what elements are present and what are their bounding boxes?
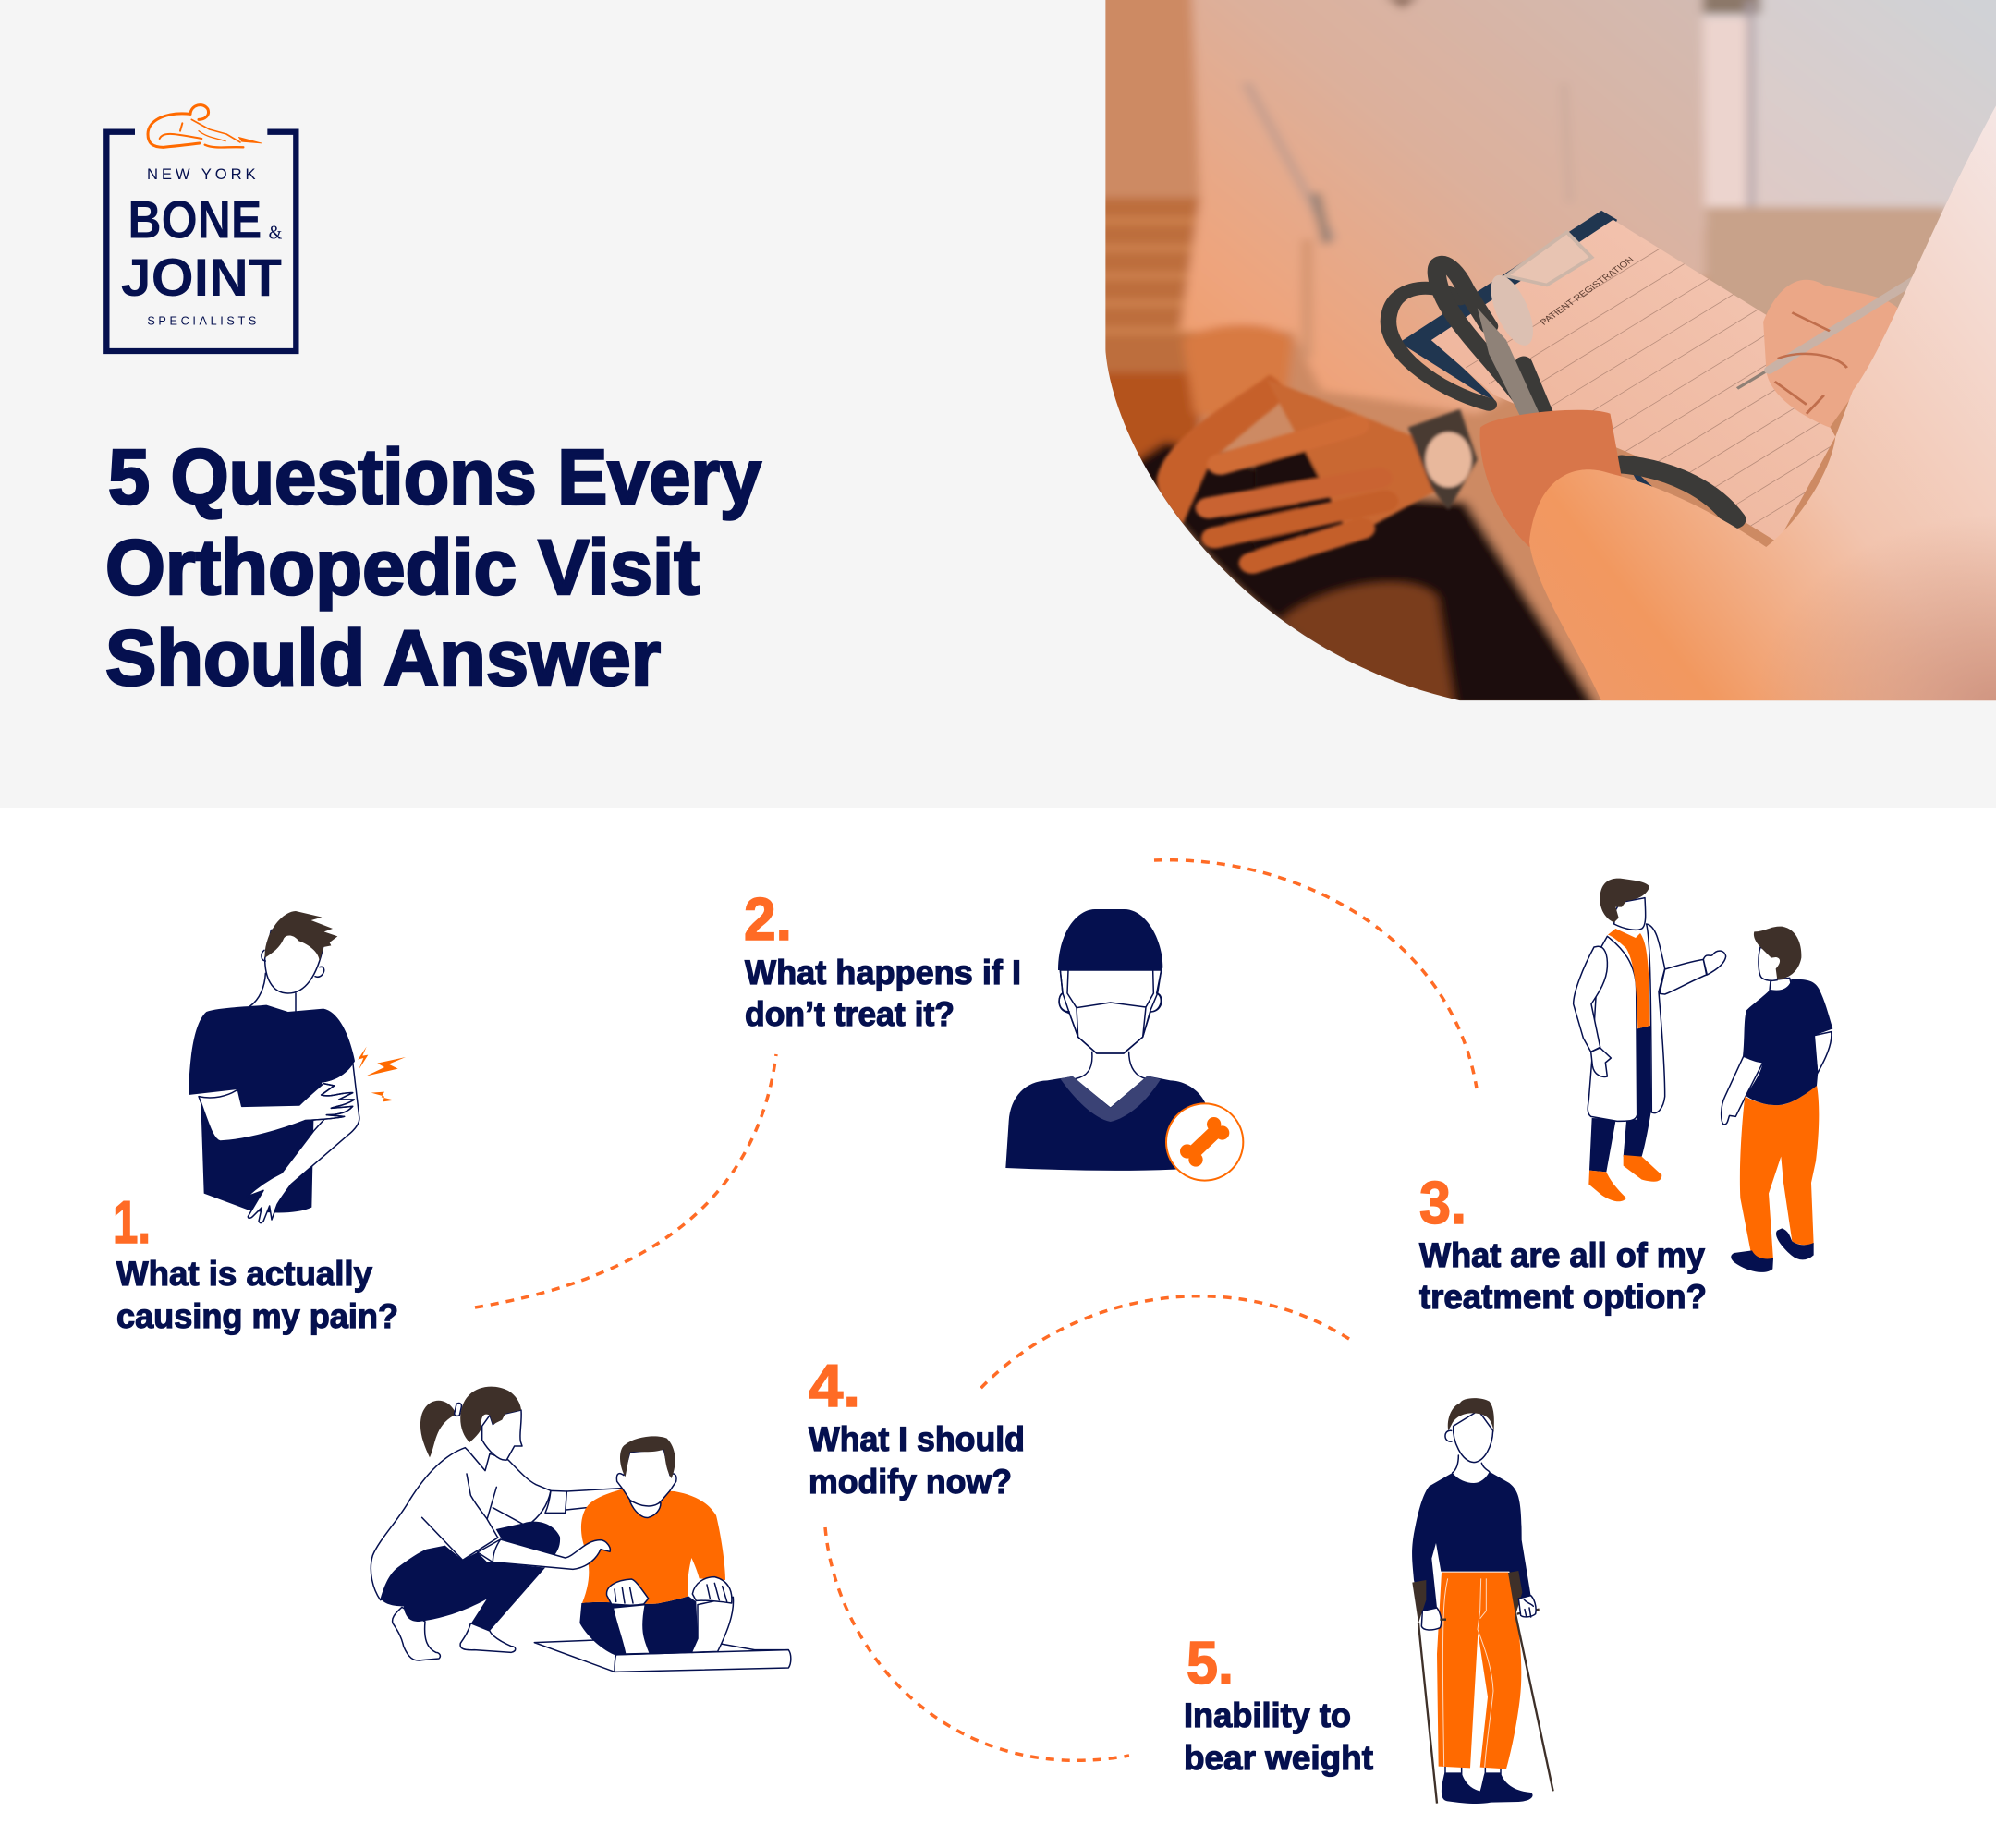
step 2 text: 2. [744, 885, 792, 953]
title: 5 Questions Every [108, 433, 761, 520]
logo: New York Bone & Joint Specialists: & [269, 221, 283, 243]
illustration: doctor talking to patient [1574, 879, 1832, 1272]
arrow: dashed arc 4 to 5 [825, 1527, 1129, 1760]
step 2 text: don’t treat it? [745, 995, 955, 1033]
logo: New York Bone & Joint Specialists [106, 105, 296, 351]
icon: pain bolts [358, 1047, 406, 1101]
logo: New York Bone & Joint Specialists: NEW YORK [147, 165, 256, 183]
step 2 text: What happens if I [745, 954, 1021, 991]
clipboard form title: PATIENT REGISTRATION [1539, 256, 1637, 327]
step 4 text [809, 1352, 1025, 1501]
step 1 text [113, 1188, 398, 1335]
logo: New York Bone & Joint Specialists: SPECIALISTS [147, 315, 256, 328]
mat [534, 1640, 791, 1672]
title: Should Answer [105, 614, 661, 701]
step 3 text: 3. [1419, 1169, 1467, 1236]
seated man [579, 1436, 788, 1672]
step 5 text [1184, 1629, 1373, 1777]
stethoscope [1388, 263, 1734, 519]
clipboard [1403, 211, 1835, 540]
crutches [1412, 1571, 1553, 1804]
patient's clasped hands and watch [1157, 374, 1478, 563]
doctor's hands, pen and coat [1480, 410, 1622, 547]
arrow: dashed arc 2 to 3 [1154, 860, 1477, 1088]
logo: New York Bone & Joint Specialists: JOINT [121, 249, 282, 308]
woman therapist [371, 1387, 622, 1660]
patient [1722, 927, 1832, 1272]
therapist's forearm over patient [478, 1539, 610, 1569]
step 4 text: modify now? [809, 1463, 1012, 1501]
title [105, 433, 761, 701]
step 3 text [1419, 1169, 1707, 1316]
illustration: physiotherapist helping seated patient [371, 1387, 791, 1672]
step 1 text: What is actually [116, 1255, 372, 1293]
step 5 text: bear weight [1184, 1739, 1373, 1777]
icon: bone badge [1166, 1103, 1243, 1181]
step 5 text: Inability to [1184, 1696, 1351, 1734]
step 4 text: 4. [809, 1352, 860, 1419]
illustration: surgeon in mask with bone badge [1005, 909, 1243, 1181]
arrow: dashed arc 1 to 2 [475, 1054, 776, 1307]
step 2 text [744, 885, 1021, 1033]
logo: New York Bone & Joint Specialists: BONE [128, 191, 262, 250]
step 3 text: treatment option? [1419, 1278, 1707, 1316]
doctor [1574, 879, 1726, 1201]
photo: doctor and patient consultation [1073, 0, 1996, 722]
logo icon: reclining figure [148, 105, 262, 148]
step 5 text: 5. [1187, 1629, 1234, 1696]
step 3 text: What are all of my [1419, 1236, 1705, 1274]
step 4 text: What I should [809, 1420, 1025, 1458]
header background [0, 0, 1996, 808]
step 1 text: 1. [113, 1188, 151, 1256]
title: Orthopedic Visit [105, 524, 700, 611]
illustration: man on crutches [1412, 1398, 1553, 1804]
arrow: dashed arc 3 to 4 [978, 1296, 1349, 1392]
illustration: man holding painful arm [189, 911, 406, 1223]
step 1 text: causing my pain? [116, 1297, 398, 1335]
